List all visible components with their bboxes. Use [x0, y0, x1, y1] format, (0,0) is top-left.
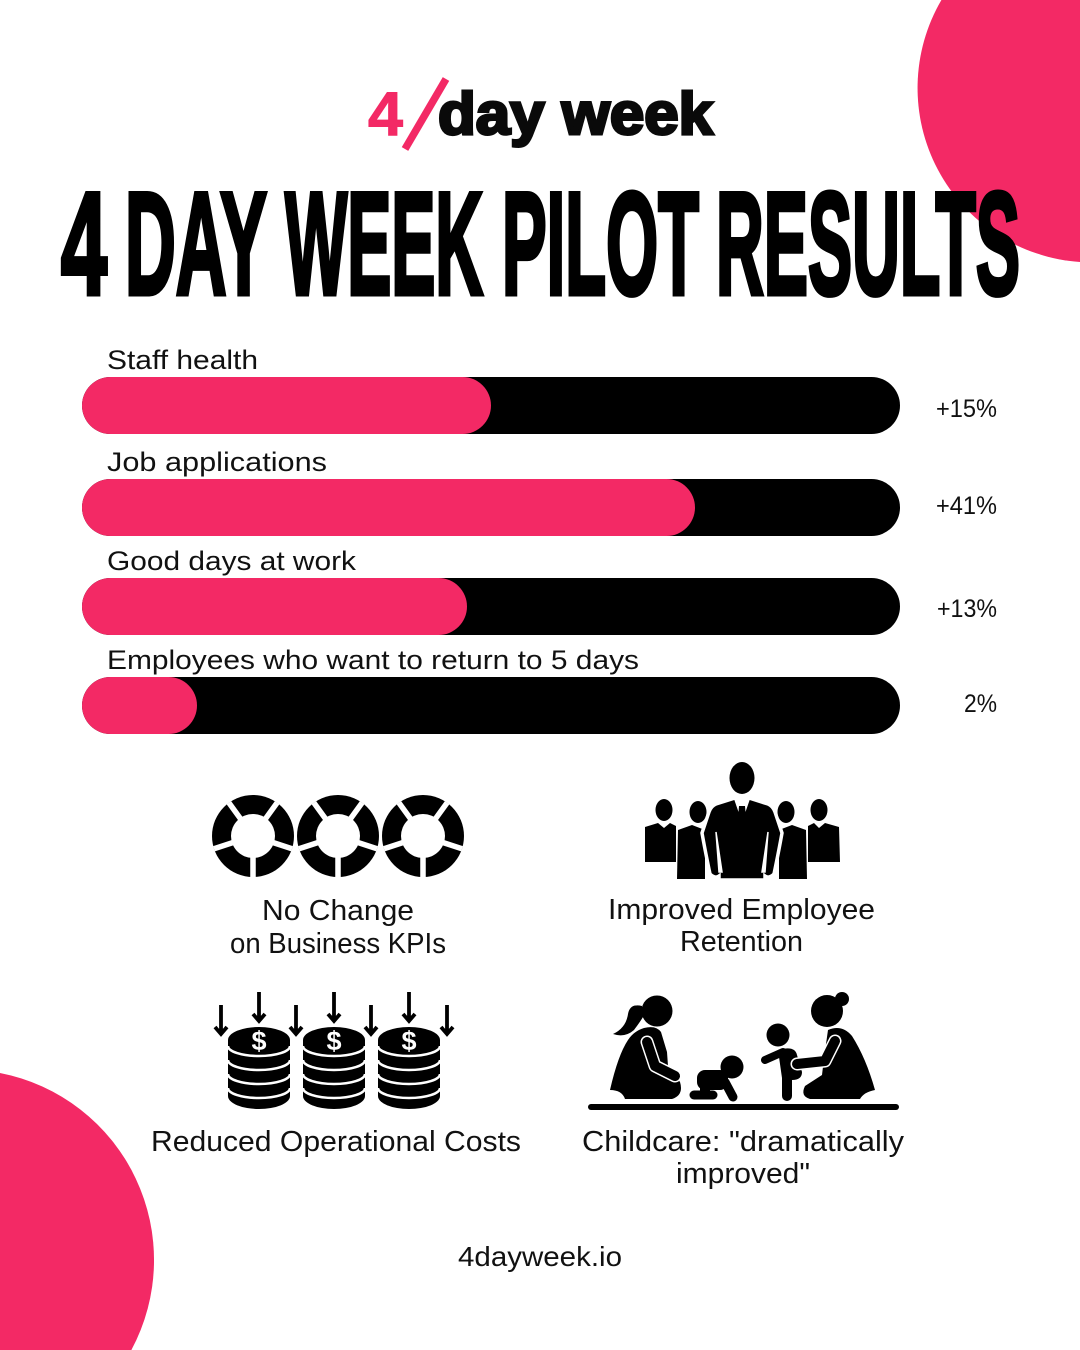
caption: no change on business KPIs: No Change [262, 895, 414, 927]
bar: employees who want to return to 5 days [82, 645, 997, 734]
bar: staff health: +15% [936, 395, 997, 423]
caption: no change on business KPIs: on Business KPIs [230, 928, 446, 960]
caption: childcare dramatically improved [582, 1126, 905, 1190]
bar: staff health: Staff health [107, 345, 258, 375]
bar: employees who want to return to 5 days: Employees who want to return to 5 days [107, 645, 639, 675]
title: PILOT [502, 162, 699, 325]
decorative circle: bottom left [0, 1073, 154, 1350]
bar: good days at work: Good days at work [107, 546, 357, 576]
bar: good days at work [82, 546, 997, 635]
title [61, 162, 1020, 325]
icon: coin stacks with down arrows: $ [326, 1026, 342, 1056]
caption: improved employee retention: Retention [680, 926, 803, 958]
bar: job applications [82, 447, 997, 536]
caption: no change on business KPIs [230, 895, 446, 960]
logo: 4/day week: 4 [368, 80, 404, 149]
logo: 4/day week: day week [438, 81, 713, 147]
bar: good days at work: +13% [937, 595, 997, 623]
caption: improved employee retention [608, 894, 875, 958]
icon: coin stacks with down arrows [215, 992, 453, 1109]
decorative circle: top right [918, 0, 1080, 262]
icon: coin stacks with down arrows: $ [251, 1026, 267, 1056]
title: WEEK [285, 162, 483, 325]
bar: employees who want to return to 5 days: 2% [964, 690, 997, 718]
icon: coin stacks with down arrows: $ [401, 1026, 417, 1056]
icon: business team [645, 762, 840, 880]
caption: childcare dramatically improved: improved" [676, 1158, 810, 1190]
bar: job applications: Job applications [107, 447, 327, 477]
caption: reduced operational costs: Reduced Operational Costs [151, 1126, 521, 1158]
footer url: 4dayweek.io [458, 1241, 622, 1272]
title: 4 [61, 162, 107, 325]
caption: improved employee retention: Improved Employee [608, 894, 875, 926]
icon: three segmented rings [212, 795, 464, 877]
bar: staff health [82, 345, 997, 434]
title: DAY [125, 162, 267, 325]
icon: childcare figures [591, 992, 896, 1107]
caption: childcare dramatically improved: Childcare: "dramatically [582, 1126, 905, 1158]
bar: job applications: +41% [936, 492, 997, 520]
